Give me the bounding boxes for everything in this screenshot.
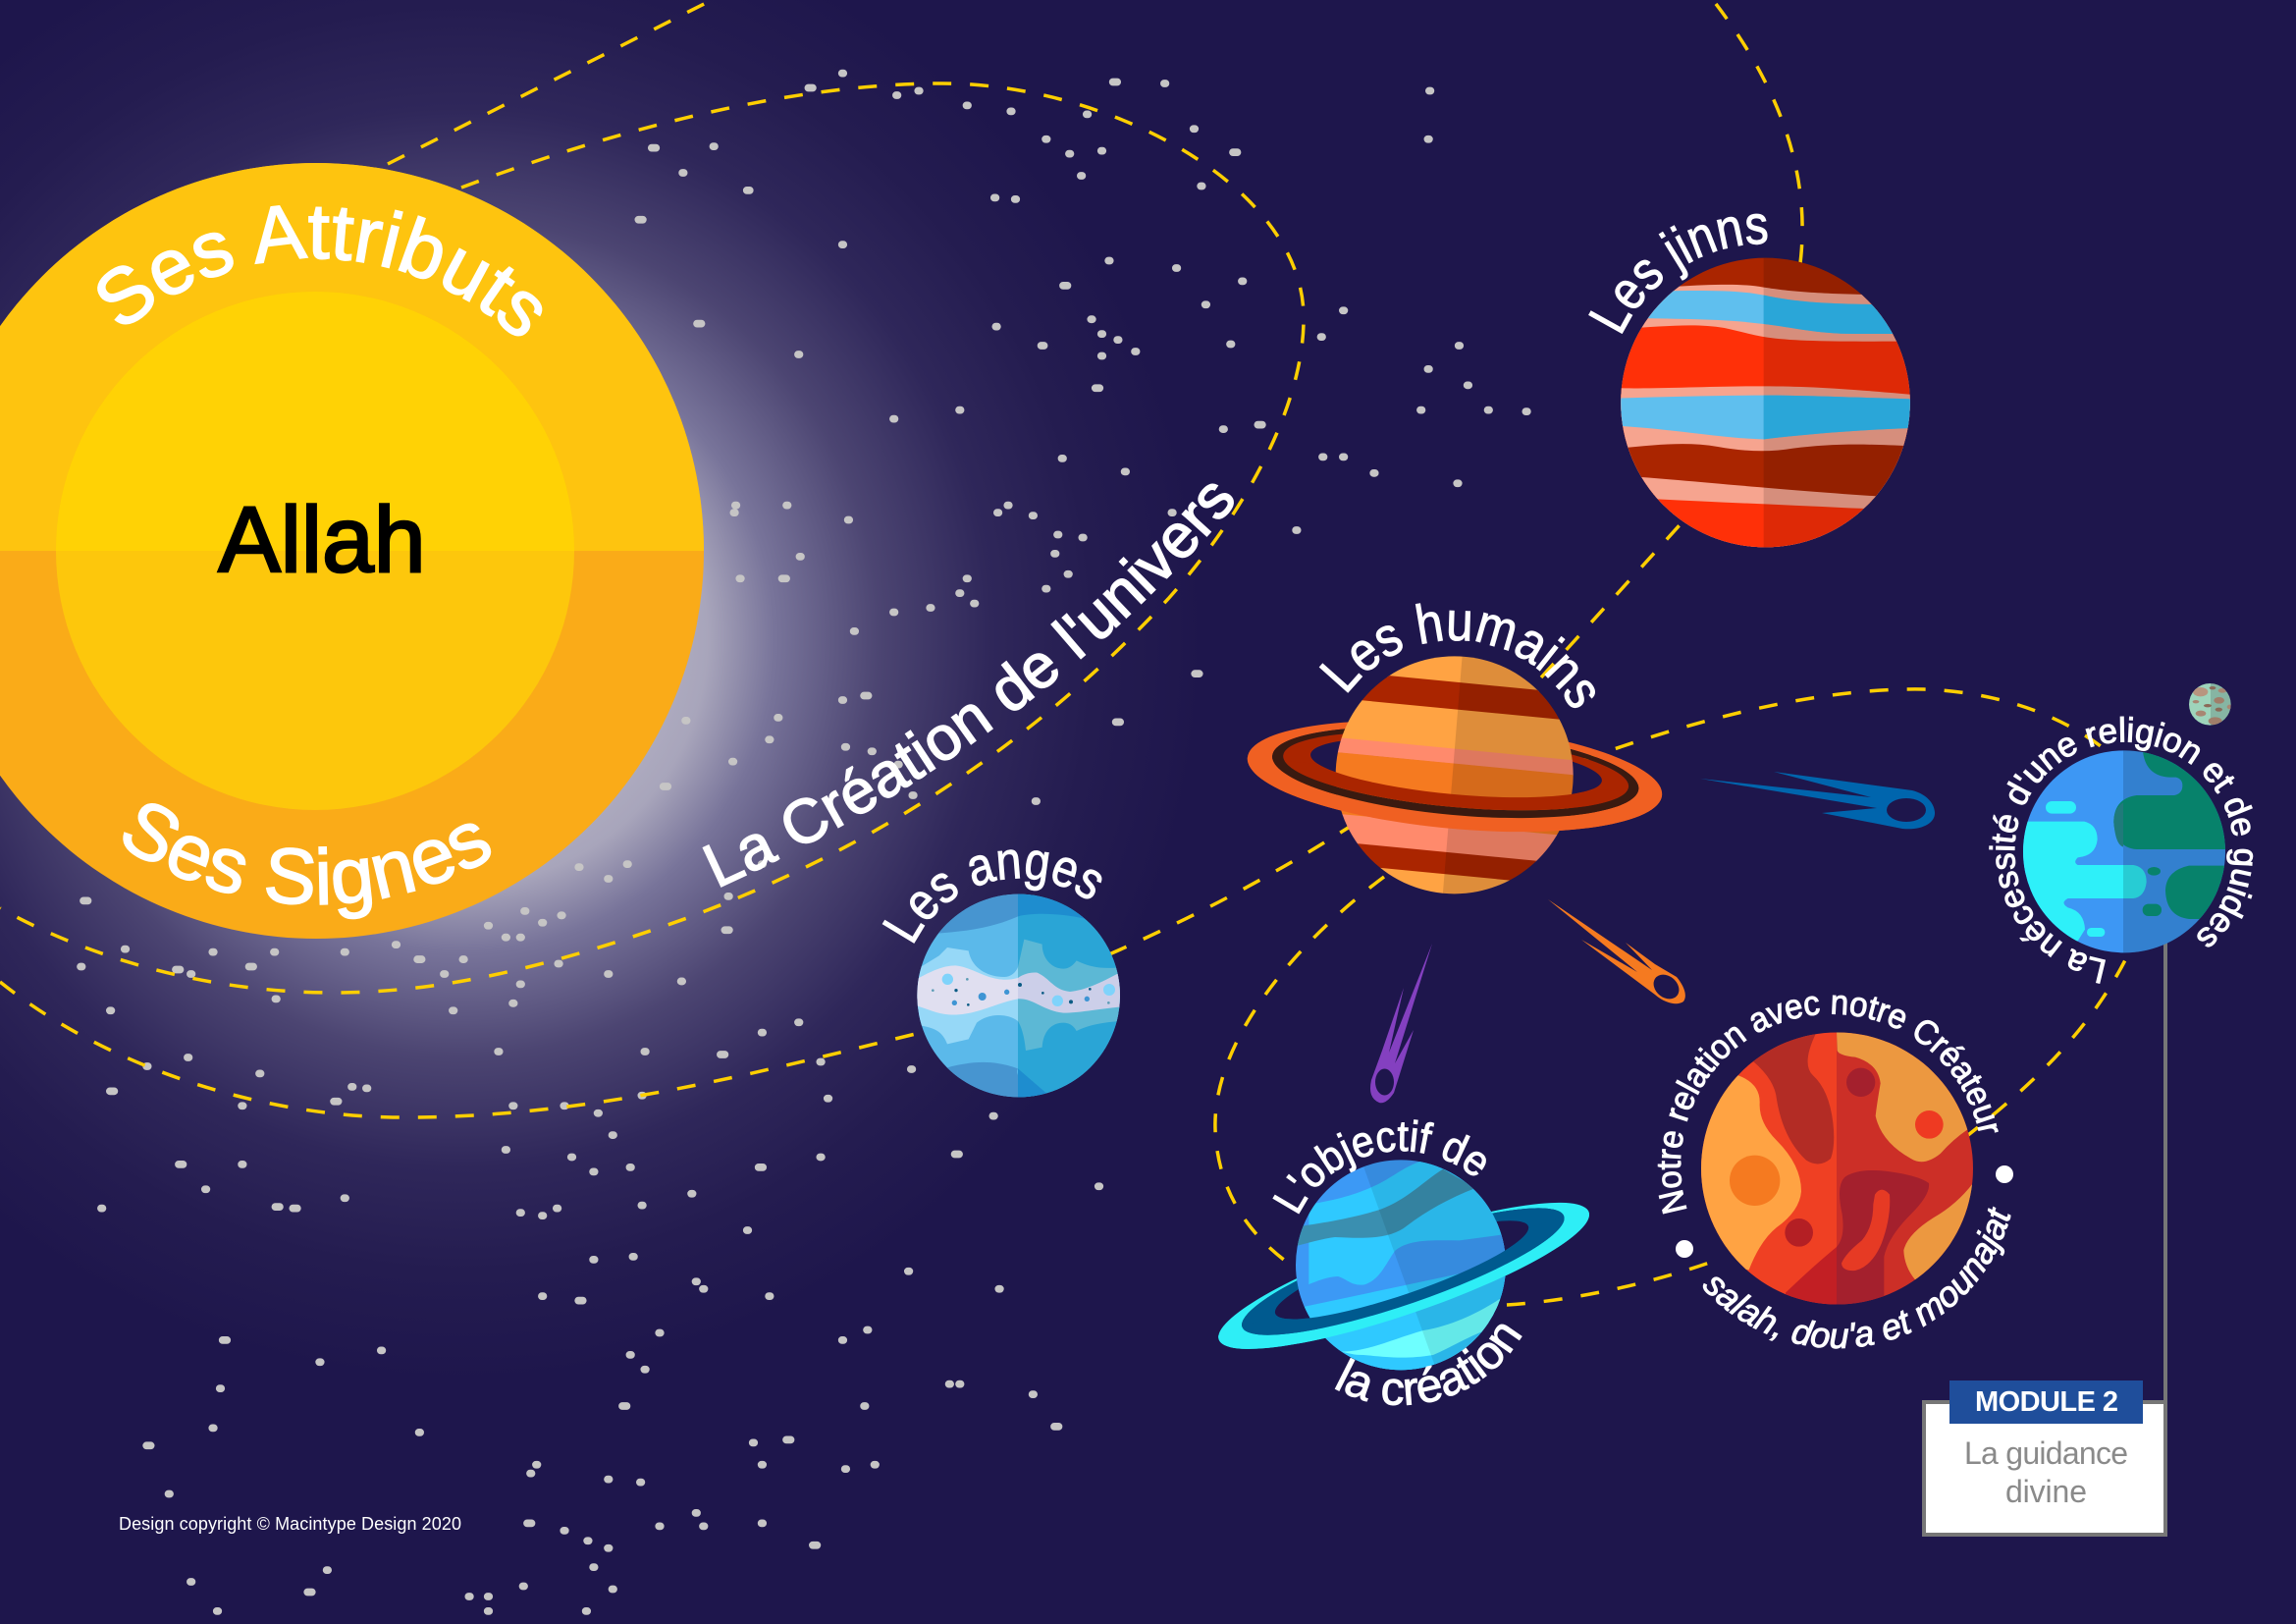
module box <box>1924 1380 2165 1535</box>
planet: Les humains with ring <box>1247 656 1663 893</box>
label: La Création de l'univers: La Création de l'univers <box>703 483 1234 888</box>
comet: blue <box>1700 772 1935 829</box>
connector line to module box <box>2163 943 2167 1402</box>
label: Les jinns: Les jinns <box>1588 214 1768 334</box>
module title: MODULE 2 <box>1975 1386 2118 1418</box>
copyright: Design copyright © Macintype Design 2020 <box>119 1514 461 1534</box>
planet: Notre relation <box>1695 1028 1980 1309</box>
label: Notre relation avec notre Créateur: Notre relation avec notre Créateur <box>1657 996 1999 1214</box>
label: Les anges: Les anges <box>881 849 1101 944</box>
planet: L'objectif de la création with ring <box>1218 1160 1589 1371</box>
dashed orbit paths <box>0 0 2130 1305</box>
label: salah, dou'a et mounajat: salah, dou'a et mounajat <box>1702 1206 2010 1349</box>
label: Les humains: Les humains <box>1319 603 1595 709</box>
bullet dots <box>1676 1165 2013 1258</box>
sun <box>0 163 704 939</box>
module subtitle line 1: La guidance <box>1964 1435 2128 1471</box>
comet: orange <box>1548 899 1685 1003</box>
module subtitle line 2: divine <box>2005 1474 2087 1509</box>
comet: purple <box>1370 944 1432 1103</box>
star field <box>80 74 1527 1611</box>
sun label: Allah: Allah <box>218 488 426 592</box>
sun label: Ses Signes: Ses Signes <box>123 803 491 919</box>
planet: Les anges <box>913 891 1126 1103</box>
label: la création: la création <box>1335 1324 1522 1406</box>
sun label: Ses Attributs: Ses Attributs <box>97 205 542 336</box>
label: La nécessité d'une religion et de guides: La nécessité d'une religion et de guides <box>1989 717 2254 984</box>
planet: Les jinns <box>1613 252 1921 553</box>
module tag <box>1949 1380 2143 1424</box>
small moon <box>2189 683 2231 726</box>
sun glow <box>0 0 1276 1394</box>
label: L'objectif de: L'objectif de <box>1272 1119 1486 1214</box>
planet: La nécessité d'une religion <box>2019 680 2235 959</box>
